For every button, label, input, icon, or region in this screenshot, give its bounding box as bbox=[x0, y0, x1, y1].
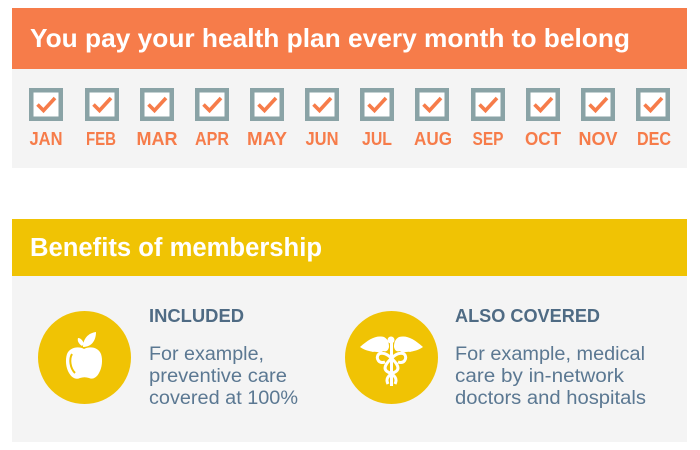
month: March bbox=[136, 90, 178, 149]
month: October: OCT bbox=[525, 128, 562, 149]
text block: included: preventive care bbox=[149, 366, 287, 387]
month: June bbox=[306, 90, 338, 149]
month: January: JAN bbox=[30, 128, 62, 149]
month: March: MAR bbox=[136, 128, 178, 149]
month: May bbox=[247, 90, 288, 149]
month: January bbox=[30, 90, 62, 149]
text block: included: covered at 100% bbox=[149, 388, 298, 409]
month: September: SEP bbox=[472, 128, 504, 149]
icon: caduceus bbox=[345, 311, 438, 404]
text block: also covered bbox=[455, 306, 646, 409]
month: July: JUL bbox=[362, 128, 392, 149]
month: November: NOV bbox=[578, 128, 618, 149]
text block: also covered: doctors and hospitals bbox=[455, 388, 646, 409]
month: April: APR bbox=[195, 128, 229, 149]
month: May: MAY bbox=[247, 128, 288, 149]
month: December bbox=[637, 90, 671, 149]
text block: also covered: care by in-network bbox=[455, 366, 625, 387]
text block: included: INCLUDED bbox=[149, 306, 244, 326]
heading banner: monthly payment: You pay your health plan every month to belong bbox=[30, 23, 630, 53]
heading banner: monthly payment bbox=[12, 8, 687, 69]
month: July bbox=[362, 90, 392, 149]
month: February: FEB bbox=[86, 128, 116, 149]
month: April bbox=[195, 90, 229, 149]
month: August bbox=[414, 90, 452, 149]
text block: also covered: ALSO COVERED bbox=[455, 306, 600, 326]
heading banner: benefits: Benefits of membership bbox=[30, 234, 322, 262]
text block: also covered: For example, medical bbox=[455, 344, 645, 365]
month: September bbox=[472, 90, 504, 149]
panel: monthly payment bbox=[12, 8, 687, 168]
month: November bbox=[578, 90, 618, 149]
text block: included bbox=[149, 306, 298, 409]
month: August: AUG bbox=[414, 128, 452, 149]
panel: benefits of membership bbox=[12, 219, 687, 442]
month: December: DEC bbox=[637, 128, 671, 149]
heading banner: benefits bbox=[12, 219, 687, 276]
text block: included: For example, bbox=[149, 344, 264, 365]
icon: apple bbox=[38, 311, 131, 404]
month: October bbox=[525, 90, 562, 149]
month: June: JUN bbox=[306, 128, 338, 149]
month: February bbox=[86, 90, 117, 149]
